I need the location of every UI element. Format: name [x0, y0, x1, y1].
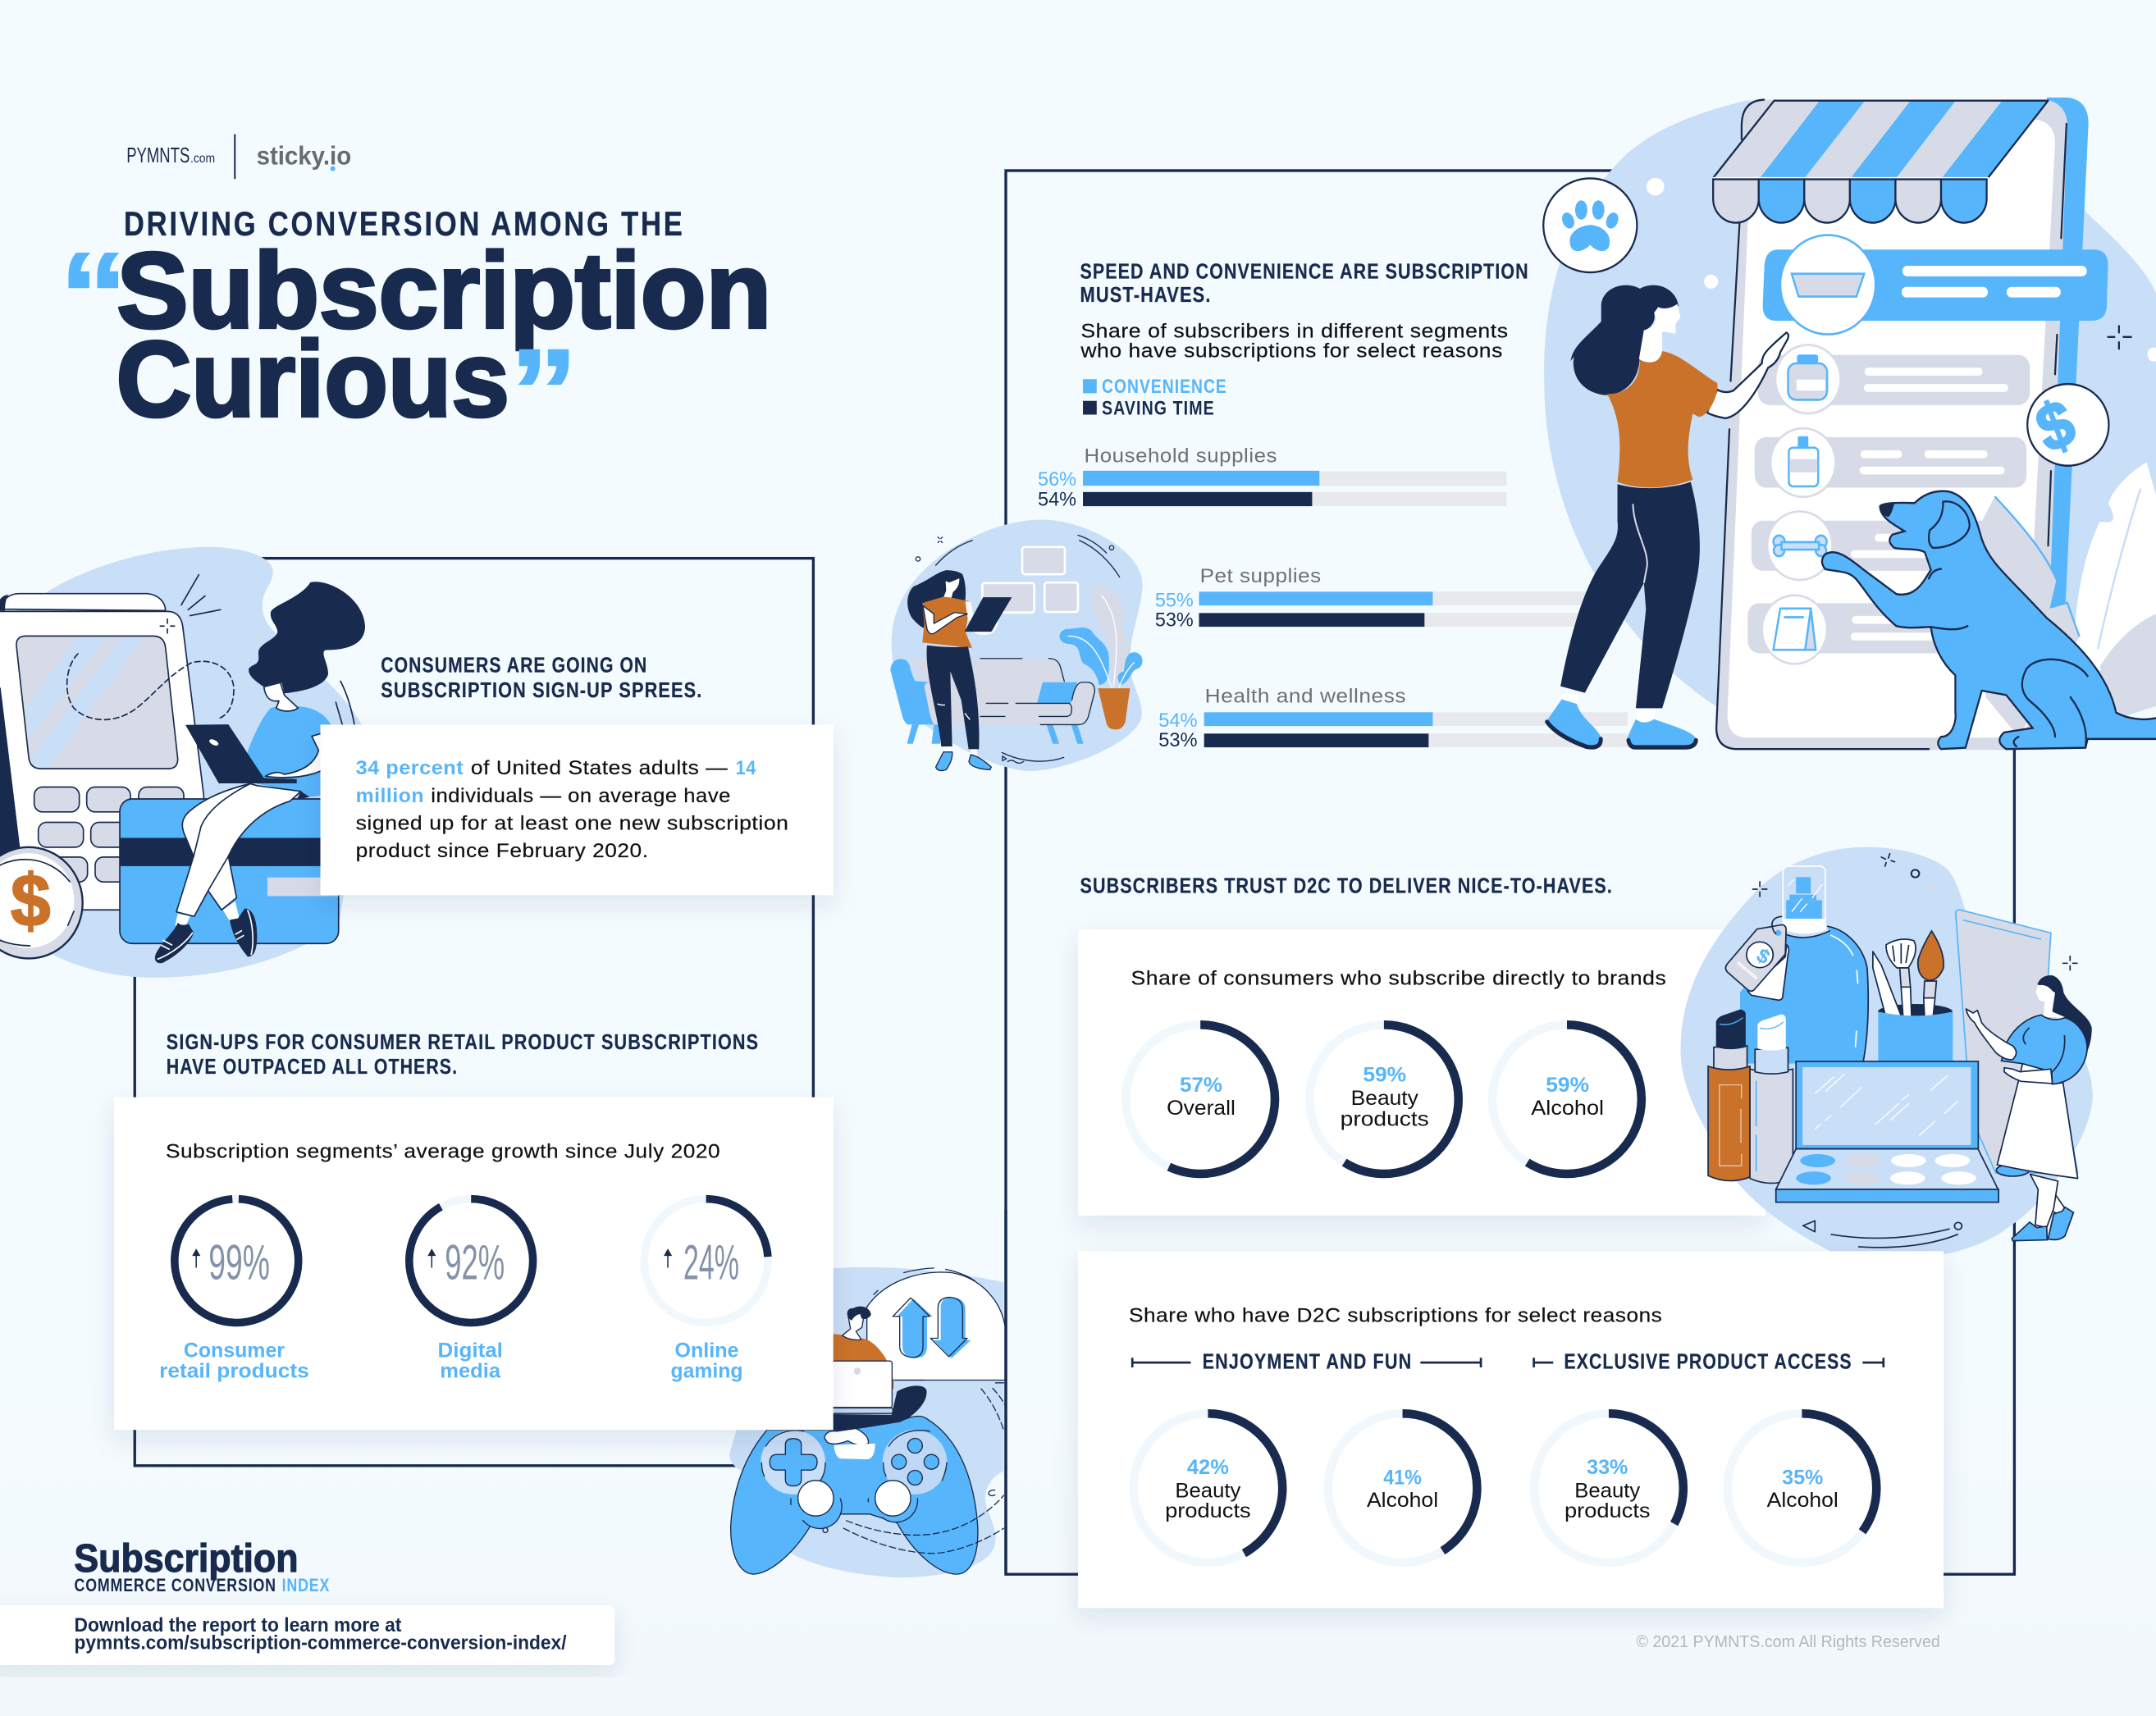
phone [1712, 98, 2108, 750]
woman figure [1966, 975, 2092, 1241]
ring: beauty products 42%: products [1165, 1499, 1251, 1522]
card: 34 percent callout: 14 [736, 757, 756, 779]
ring: consumer retail products 99%: Consumer [184, 1339, 285, 1362]
ring: digital media 92%: Digital [437, 1339, 503, 1362]
illustration: woman with tablet in living room [890, 519, 1143, 771]
ring: alcohol 35%: Alcohol [1767, 1489, 1839, 1512]
ring: overall 57%: 57% [1180, 1074, 1222, 1097]
ring: overall 57% [1126, 1025, 1275, 1174]
sofa [890, 659, 1094, 744]
card: growth rings [114, 1098, 834, 1430]
card: growth rings: Subscription segments’ average growth since July 2020 [166, 1140, 720, 1162]
label: exclusive product access: EXCLUSIVE PRODUCT ACCESS [1564, 1349, 1852, 1374]
panel frame: right [1006, 171, 2014, 1574]
ring: beauty products 42%: 42% [1187, 1456, 1229, 1479]
frame edge over illustration [1005, 1210, 1007, 1574]
heading: consumers going on sign-up sprees: SUBSCRIPTION SIGN-UP SPREES. [381, 678, 702, 702]
footer logo: INDEX [282, 1575, 330, 1595]
ring: alcohol 41%: Alcohol [1367, 1489, 1438, 1512]
ring: alcohol 41% [1328, 1413, 1477, 1563]
awning [1712, 101, 2049, 223]
bar group: health and wellness: 54% [1158, 710, 1198, 732]
row: bone [1752, 511, 2022, 580]
heading: consumers going on sign-up sprees: CONSUMERS ARE GOING ON [381, 653, 647, 678]
ring: beauty products 33% [1534, 1413, 1683, 1563]
ring: alcohol 41%: 41% [1383, 1466, 1422, 1489]
card: 34 percent callout [321, 724, 834, 895]
title [59, 204, 771, 459]
ring: online gaming 24%: Online [675, 1339, 738, 1362]
card: 34 percent callout: million [356, 785, 424, 807]
bar group: household supplies: 56% [1038, 468, 1076, 491]
woman figure [155, 582, 365, 963]
card: direct subscription rings: Share of consumers who subscribe directly to brands [1131, 968, 1666, 990]
ring: alcohol 59%: Alcohol [1531, 1097, 1604, 1120]
legend: CONVENIENCE [1102, 376, 1227, 398]
ring: digital media 92% [409, 1199, 533, 1383]
credit card [120, 799, 339, 943]
price tag: $ [1752, 944, 1774, 969]
ring: overall 57%: Overall [1167, 1097, 1236, 1120]
illustration: gamer on controller [729, 1267, 1005, 1577]
logos: PYMNTS [126, 143, 190, 167]
bar group: household supplies: 54% [1038, 489, 1076, 511]
ring: beauty products 59%: 59% [1363, 1063, 1406, 1086]
bar group: household supplies [1038, 445, 1506, 511]
icon: dollar coin [0, 847, 83, 958]
copyright: © 2021 PYMNTS.com All Rights Reserved [1636, 1633, 1940, 1651]
ring: beauty products 33%: 33% [1587, 1456, 1628, 1479]
bar group: household supplies: Household supplies [1085, 445, 1277, 467]
ring: beauty products 59% [1309, 1025, 1459, 1174]
panel: sign-ups outpaced [114, 1029, 834, 1430]
footer card: download link [0, 1605, 614, 1665]
ring: beauty products 59%: products [1341, 1108, 1429, 1131]
heading: speed and convenience: MUST-HAVES. [1080, 282, 1212, 307]
makeup palette [1776, 1061, 1998, 1203]
ring: beauty products 42% [1134, 1413, 1282, 1563]
ring: beauty products 33%: Beauty [1574, 1479, 1641, 1502]
footer logo: COMMERCE CONVERSION [75, 1575, 276, 1595]
legend [1083, 376, 1227, 420]
logos [126, 135, 351, 179]
gamer figure [804, 1307, 927, 1434]
chart description [1080, 321, 1509, 363]
dog [1822, 491, 2156, 749]
arrows icon [893, 1298, 971, 1358]
icon: dollar coin: $ [11, 860, 51, 942]
heading: consumers going on sign-up sprees [381, 653, 702, 702]
icon: dollar badge: $ [2027, 386, 2084, 467]
ring: digital media 92%: media [440, 1360, 501, 1383]
background leaves [2073, 462, 2156, 714]
potted plant [1059, 582, 1143, 729]
card: direct subscription rings [1078, 929, 1765, 1216]
logos: sticky.io [257, 140, 351, 170]
ring: beauty products 42%: Beauty [1175, 1479, 1241, 1502]
title: ” [509, 324, 578, 459]
ring: alcohol 59%: 59% [1546, 1074, 1589, 1097]
heading: speed and convenience: SPEED AND CONVENIENCE ARE SUBSCRIPTION [1080, 259, 1529, 284]
card: 34 percent callout: product since February 2020. [356, 840, 649, 862]
ring: alcohol 35%: 35% [1782, 1466, 1823, 1489]
section: speed and convenience [1038, 259, 1628, 751]
ring: beauty products 59%: Beauty [1351, 1087, 1418, 1110]
heading: subscribers trust D2C: SUBSCRIBERS TRUST D2C TO DELIVER NICE-TO-HAVES. [1080, 874, 1613, 898]
card: 34 percent callout: signed up for at least one new subscription [356, 813, 789, 835]
bar group: pet supplies: 55% [1155, 589, 1194, 611]
bar group: pet supplies [1155, 565, 1623, 632]
brush cup [1873, 931, 1953, 1061]
foreground leaf [1982, 496, 2080, 737]
ring: online gaming 24%: gaming [670, 1360, 742, 1383]
title: Subscription [116, 230, 771, 350]
footer card: download link: Download the report to learn more at [75, 1614, 401, 1636]
illustration: woman with laptop on credit card [0, 547, 367, 978]
title: Curious [116, 319, 509, 439]
heading: speed and convenience [1080, 259, 1529, 307]
bar group: health and wellness: Health and wellness [1205, 686, 1406, 708]
logos: .com [190, 152, 215, 166]
ring: consumer retail products 99%: 99% [208, 1234, 270, 1289]
card: 34 percent callout: individuals — on average have [431, 785, 731, 807]
ring: consumer retail products 99% [159, 1197, 309, 1383]
chart description: Share of subscribers in different segments [1080, 321, 1509, 343]
footer logo: Subscription [74, 1536, 299, 1581]
woman pointing [1546, 285, 1788, 749]
legend: SAVING TIME [1102, 398, 1215, 420]
ring: digital media 92%: 92% [445, 1234, 505, 1289]
label: enjoyment and fun: ENJOYMENT AND FUN [1203, 1349, 1412, 1374]
row: jar [1758, 345, 2030, 413]
bar group: pet supplies: Pet supplies [1200, 565, 1322, 587]
panel: sign-up sprees text [321, 653, 834, 895]
row: bottle [1755, 428, 2026, 497]
ring: consumer retail products 99%: retail products [159, 1360, 309, 1383]
illustration: cosmetics and woman at mirror [1681, 847, 2093, 1257]
chart description: who have subscriptions for select reasons [1080, 340, 1503, 363]
price tag [1725, 916, 1788, 1000]
lipsticks [1708, 1010, 1793, 1183]
ring: beauty products 33%: products [1564, 1499, 1651, 1522]
decorative dots [1647, 178, 2156, 362]
header row [1763, 235, 2108, 335]
card: D2C reasons rings [1078, 1251, 1944, 1608]
ring: alcohol 59% [1492, 1025, 1642, 1174]
footer card: download link: pymnts.com/subscription-commerce-conversion-index/ [75, 1632, 567, 1654]
card: D2C reasons rings: Share who have D2C subscriptions for select reasons [1129, 1305, 1662, 1327]
icon: dollar badge [2027, 384, 2108, 467]
icon: paw badge [1543, 178, 1637, 272]
row: box [1747, 596, 2018, 664]
card: 34 percent callout: 34 percent [356, 757, 464, 779]
ring: online gaming 24%: 24% [683, 1234, 739, 1289]
ring: alcohol 35% [1728, 1413, 1876, 1563]
heading: sign-ups outpaced: SIGN-UPS FOR CONSUMER RETAIL PRODUCT SUBSCRIPTIONS [167, 1029, 759, 1054]
title: DRIVING CONVERSION AMONG THE [124, 204, 685, 243]
illustration: woman and dog at phone shop [1543, 98, 2156, 750]
title: “ [59, 227, 128, 363]
bar group: pet supplies: 53% [1155, 609, 1194, 632]
spray bottle [1740, 866, 1868, 1064]
wall frames [982, 547, 1078, 613]
bar group: health and wellness: 53% [1158, 729, 1198, 751]
ring: online gaming 24% [644, 1199, 768, 1383]
woman figure [907, 570, 1012, 771]
bar group: health and wellness [1158, 686, 1628, 751]
heading: sign-ups outpaced: HAVE OUTPACED ALL OTHERS. [167, 1054, 458, 1079]
game controller [731, 1416, 978, 1574]
heading: sign-ups outpaced [167, 1029, 759, 1079]
card: 34 percent callout: of United States adults — [471, 757, 728, 779]
panel frame: left [135, 559, 813, 1466]
standing mirror [1956, 910, 2078, 1173]
